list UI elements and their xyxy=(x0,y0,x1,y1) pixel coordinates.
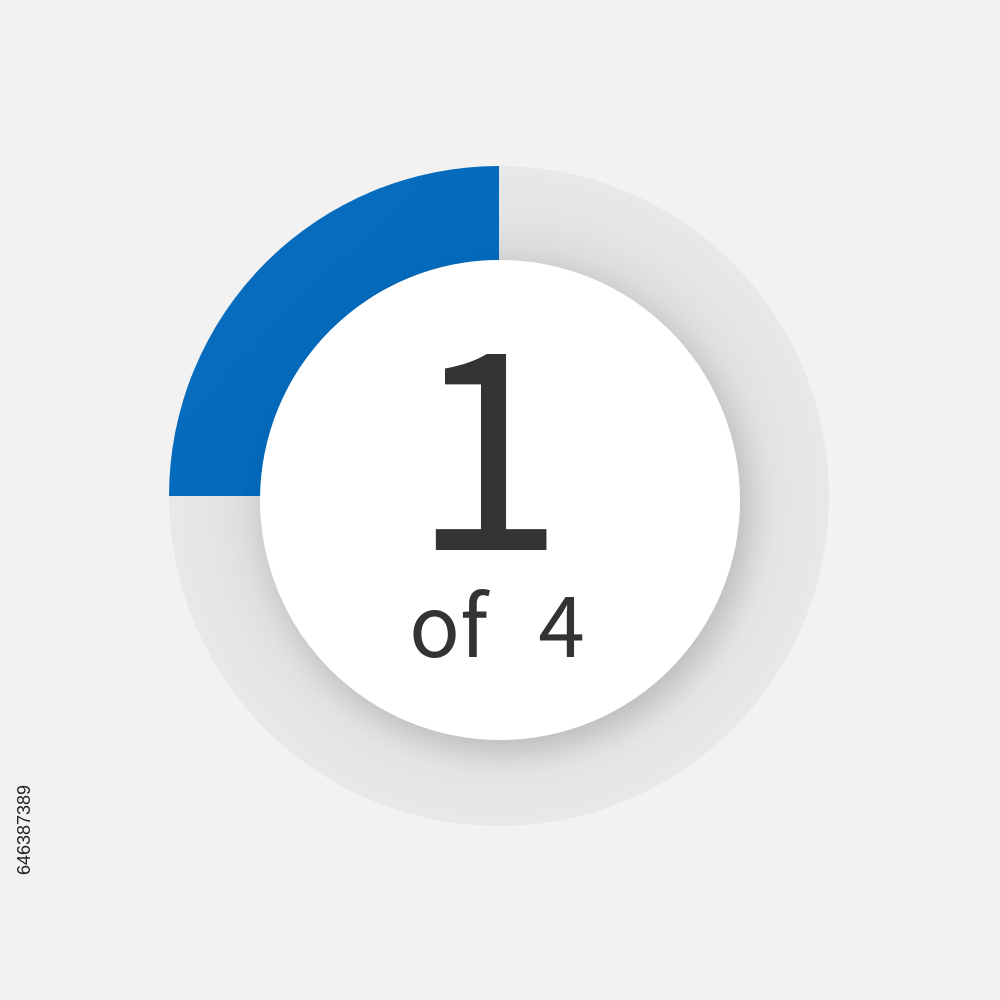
big number: 1 xyxy=(412,232,564,630)
label: of 4: of 4 xyxy=(409,561,585,682)
inner white circle xyxy=(260,260,740,740)
ring progress segment: 1 of 4 xyxy=(169,166,499,496)
inner circle shadow xyxy=(268,272,748,752)
side stock id: 646387389 xyxy=(14,785,34,875)
ring background xyxy=(169,166,829,826)
